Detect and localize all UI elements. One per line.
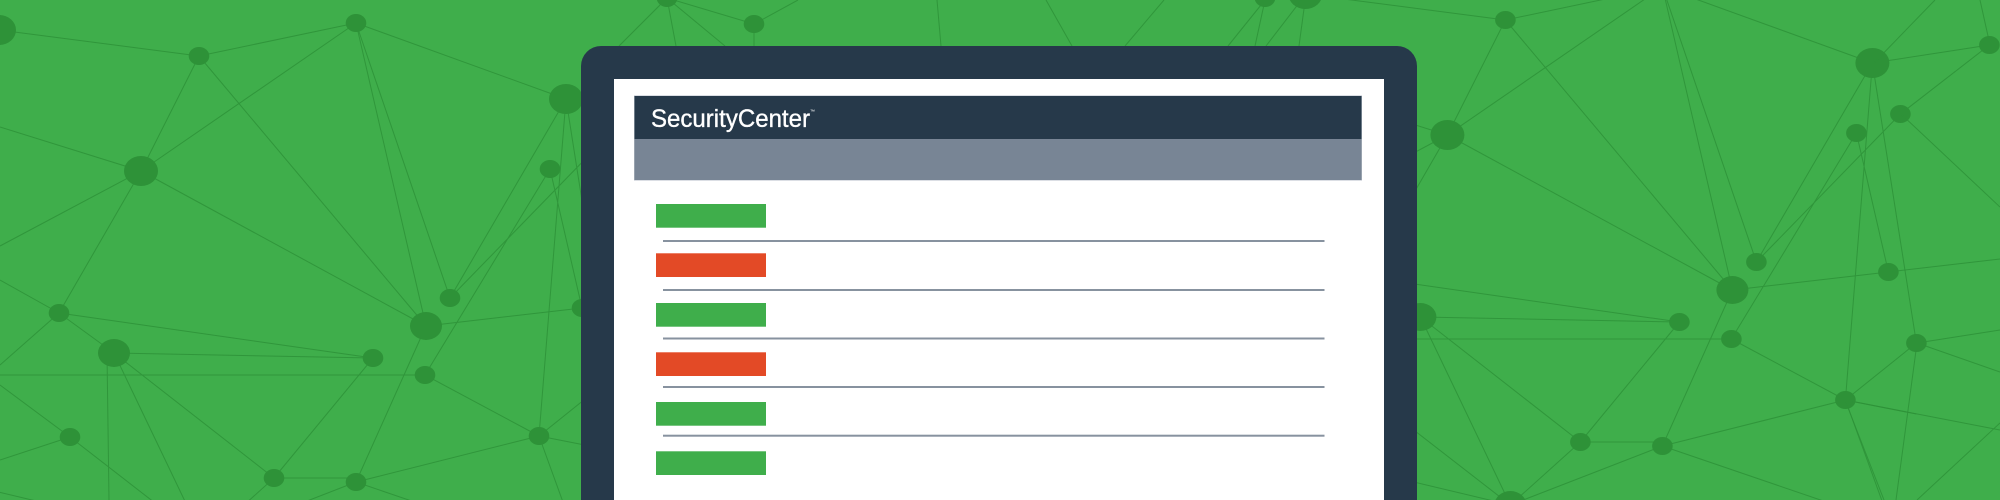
status bar: green row 1	[656, 204, 766, 228]
logo: SecurityCenter: ™	[810, 109, 815, 115]
status bar: green row 5	[656, 402, 766, 426]
screen: white page	[614, 79, 1384, 500]
status bar: green row 3	[656, 303, 766, 327]
logo: SecurityCenter: SecurityCenter	[651, 105, 810, 133]
status bar: red row 4	[656, 352, 766, 376]
header panel with logo	[634, 96, 1362, 180]
status bar: green row 6	[656, 451, 766, 475]
laptop screen frame	[581, 46, 1417, 500]
status bar: red row 2	[656, 253, 766, 277]
status list: rows of bars and dividers	[656, 204, 1324, 475]
